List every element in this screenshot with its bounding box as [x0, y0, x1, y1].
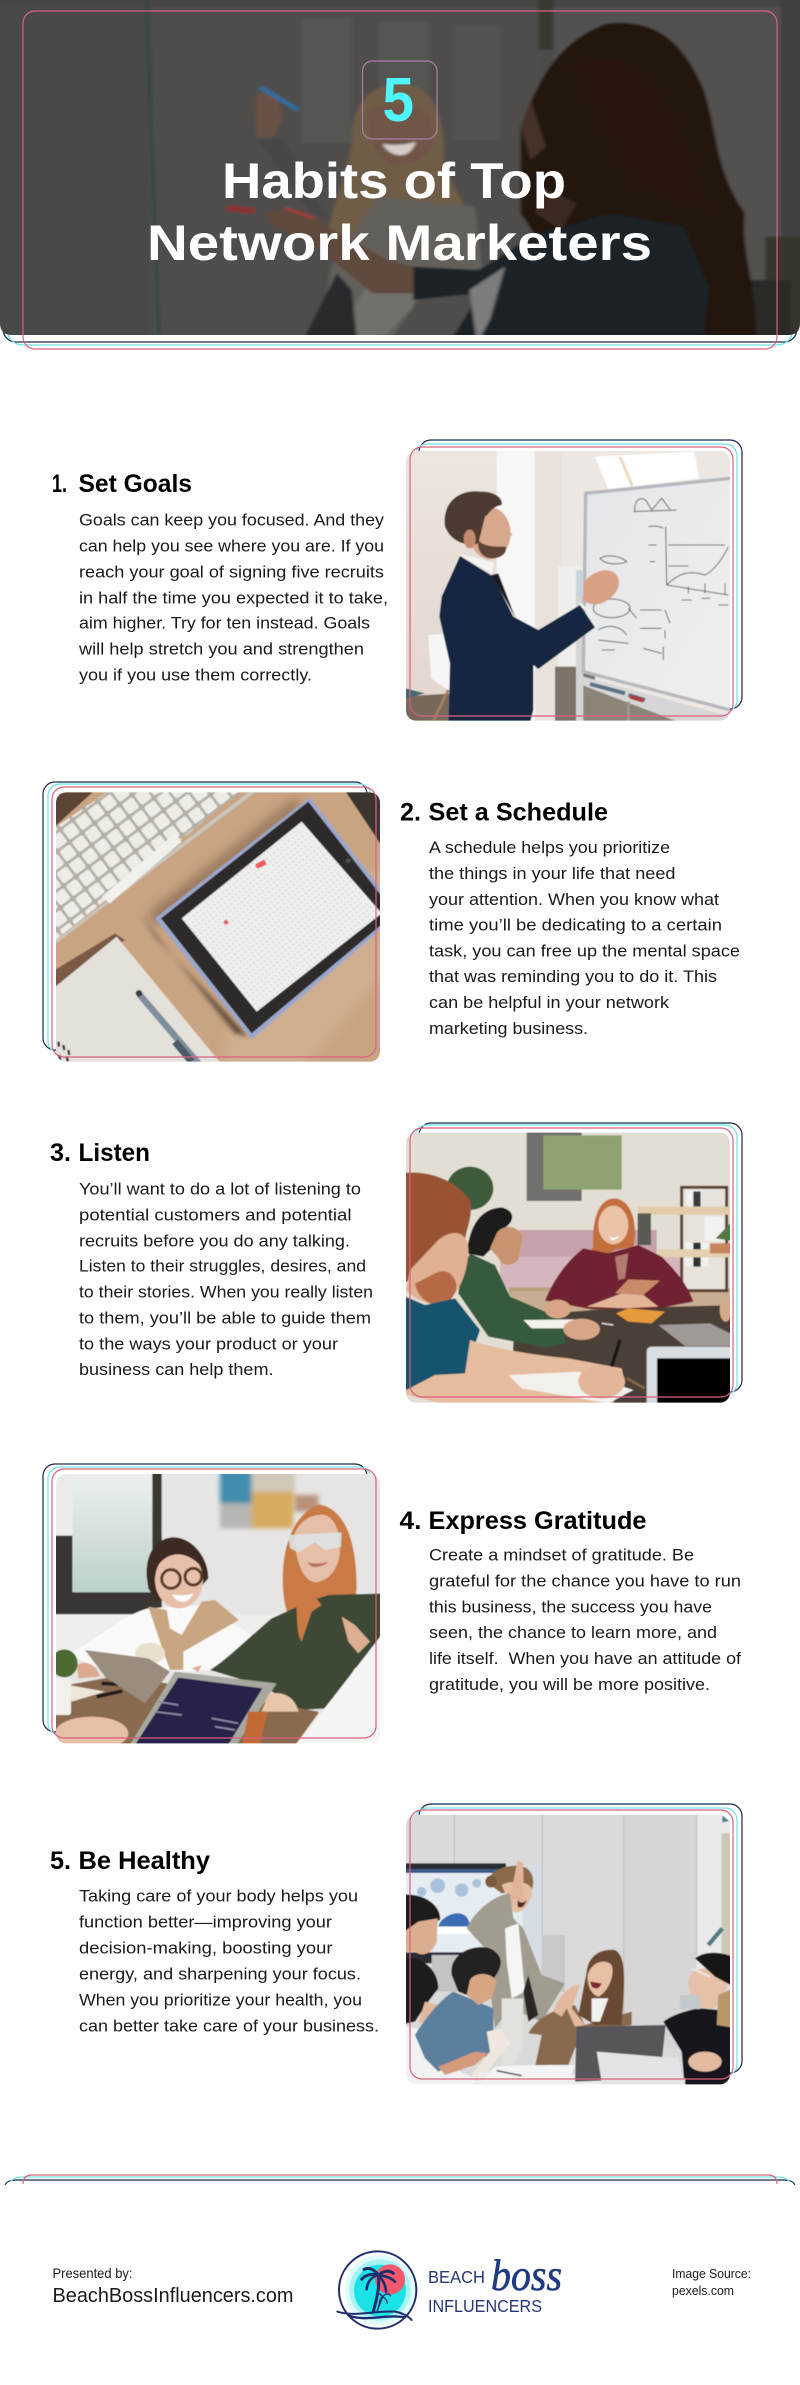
body text 3: to them, you’ll be able to guide them [79, 1310, 371, 1328]
heading 4: 4. [400, 1507, 422, 1535]
heading 5: 5. [50, 1847, 71, 1875]
raised arm [258, 138, 327, 217]
footer: image source: Image Source: [672, 2266, 751, 2281]
logo wordmark: BEACH [428, 2267, 485, 2287]
heading 2: 2. [400, 798, 421, 826]
footer logo: Beach Boss Influencers [337, 2251, 562, 2329]
right woman [520, 23, 756, 343]
body text 2: the things in your life that need [429, 865, 676, 883]
body text 2: time you’ll be dedicating to a certain [429, 916, 722, 934]
body text 5 [79, 1888, 379, 2036]
body text 4: life itself. When you have an attitude of [429, 1650, 741, 1668]
body text 3: to their stories. When you really listen [79, 1284, 373, 1302]
body text 1: you if you use them correctly. [79, 666, 312, 684]
body text 3: recruits before you do any talking. [79, 1232, 350, 1250]
logo wordmark: boss [491, 2251, 562, 2300]
body text 1: can help you see where you are. If you [79, 538, 384, 556]
heading 5: Be Healthy [78, 1847, 210, 1875]
footer: presented by: Presented by: [52, 2265, 132, 2281]
panel: step 4 express gratitude [43, 1464, 741, 1750]
photo 5: team celebrating around a table [399, 1808, 737, 2092]
photo 1: man writing on whiteboard [399, 444, 737, 730]
body text 1: reach your goal of signing five recruits [79, 564, 384, 582]
body text 4 [429, 1546, 741, 1694]
body text 2: that was reminding you to do it. This [429, 968, 717, 986]
body text 3: business can help them. [79, 1361, 274, 1379]
body text 4: Create a mindset of gratitude. Be [429, 1546, 694, 1564]
body text 1: Goals can keep you focused. And they [79, 512, 385, 530]
body text 3 [79, 1180, 373, 1379]
footer: image source: pexels.com [672, 2283, 734, 2298]
photo 4: two smiling women at a laptop [49, 1467, 387, 1750]
body text 2: marketing business. [429, 1020, 588, 1038]
header photo: two women at a whiteboard under dark overlay [0, 0, 800, 343]
photo 1 frame back [415, 440, 742, 712]
photo 2: tablet calendar on wooden desk [56, 792, 380, 1062]
panel: step 5 be healthy [50, 1804, 742, 2092]
body text 2: A schedule helps you prioritize [429, 839, 670, 857]
header panel [0, 0, 800, 349]
heading 3: Listen [78, 1139, 150, 1167]
photo 2 pink frame [52, 787, 376, 1057]
header back frames [3, 0, 797, 345]
footer: presented by [52, 2265, 294, 2307]
body text 1: aim higher. Try for ten instead. Goals [79, 614, 370, 632]
photo 5 pink frame [410, 1810, 733, 2079]
blonde woman hair [328, 84, 464, 239]
body text 1: in half the time you expected it to take, [79, 590, 388, 608]
body text 5: function better—improving your [79, 1914, 333, 1932]
body text 5: Taking care of your body helps you [79, 1888, 358, 1906]
photo 3 frame back [415, 1123, 742, 1395]
photo 4 pink frame [52, 1469, 376, 1738]
body text 4: seen, the chance to learn more, and [429, 1624, 717, 1642]
logo wordmark: INFLUENCERS [428, 2296, 542, 2316]
logo emblem: palm tree and sun [337, 2251, 416, 2329]
body text 3: You’ll want to do a lot of listening to [79, 1180, 361, 1198]
body text 4: this business, the success you have [429, 1598, 712, 1616]
body text 3: to the ways your product or your [79, 1336, 339, 1354]
body text 5: can better take care of your business. [79, 2018, 379, 2036]
photo 4 frame back [43, 1464, 371, 1735]
photo 3: meeting around a table [406, 1132, 730, 1403]
heading 3: 3. [50, 1139, 71, 1167]
body text 3: potential customers and potential [79, 1206, 352, 1224]
body text 1: will help stretch you and strengthen [78, 640, 364, 658]
body text 2: can be helpful in your network [429, 994, 670, 1012]
body text 5: When you prioritize your health, you [79, 1992, 362, 2010]
body text 4: gratitude, you will be more positive. [429, 1676, 710, 1694]
footer: presented by: BeachBossInfluencers.com [52, 2285, 294, 2307]
panel: step 2 set a schedule [43, 782, 740, 1068]
panel: step 1 set goals [52, 440, 742, 730]
number badge [362, 61, 437, 139]
body text 2: your attention. When you know what [429, 891, 719, 909]
photo 2 frame back [43, 782, 371, 1053]
heading 4: Express Gratitude [428, 1507, 647, 1535]
body text 1 [78, 512, 388, 684]
body text 2 [429, 839, 740, 1038]
photo 1 pink frame [410, 447, 733, 716]
logo wordmark [428, 2251, 562, 2316]
body text 4: grateful for the chance you have to run [429, 1572, 741, 1590]
title [147, 153, 652, 271]
body text 3: Listen to their struggles, desires, and [79, 1258, 366, 1276]
body text 5: decision-making, boosting your [79, 1940, 333, 1958]
heading 2: Set a Schedule [428, 798, 608, 826]
header pink frame [23, 11, 777, 349]
heading 1: 1. [52, 470, 67, 498]
heading 1: Set Goals [78, 470, 192, 498]
photo 3 pink frame [410, 1128, 733, 1397]
title: Habits of Top [222, 153, 566, 209]
number badge: 5 [382, 66, 414, 135]
footer top rule lines [5, 2175, 795, 2185]
title: Network Marketers [147, 215, 652, 271]
outstretched arm [265, 209, 413, 293]
photo 5 frame back [415, 1804, 742, 2076]
body text 5: energy, and sharpening your focus. [79, 1966, 361, 1984]
panel: step 3 listen [50, 1123, 742, 1412]
body text 2: task, you can free up the mental space [429, 942, 740, 960]
footer: image source [672, 2266, 751, 2298]
